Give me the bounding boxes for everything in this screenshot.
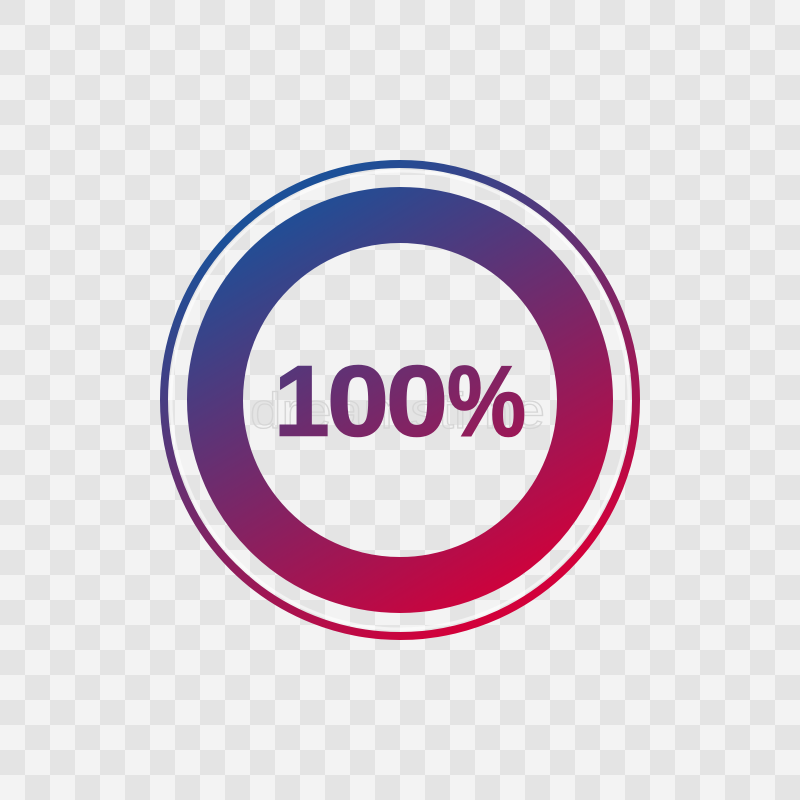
percentage label: 1 [274, 346, 330, 458]
percentage label: % [447, 346, 526, 458]
percentage label: 0 [327, 346, 389, 458]
watermark: dreamstime [250, 383, 545, 439]
thick donut ring at 100% [215, 215, 585, 585]
white halo between rings [171, 171, 629, 629]
percentage label: 0 [386, 346, 448, 458]
percentage label [274, 346, 526, 458]
outer thin ring [164, 164, 636, 636]
